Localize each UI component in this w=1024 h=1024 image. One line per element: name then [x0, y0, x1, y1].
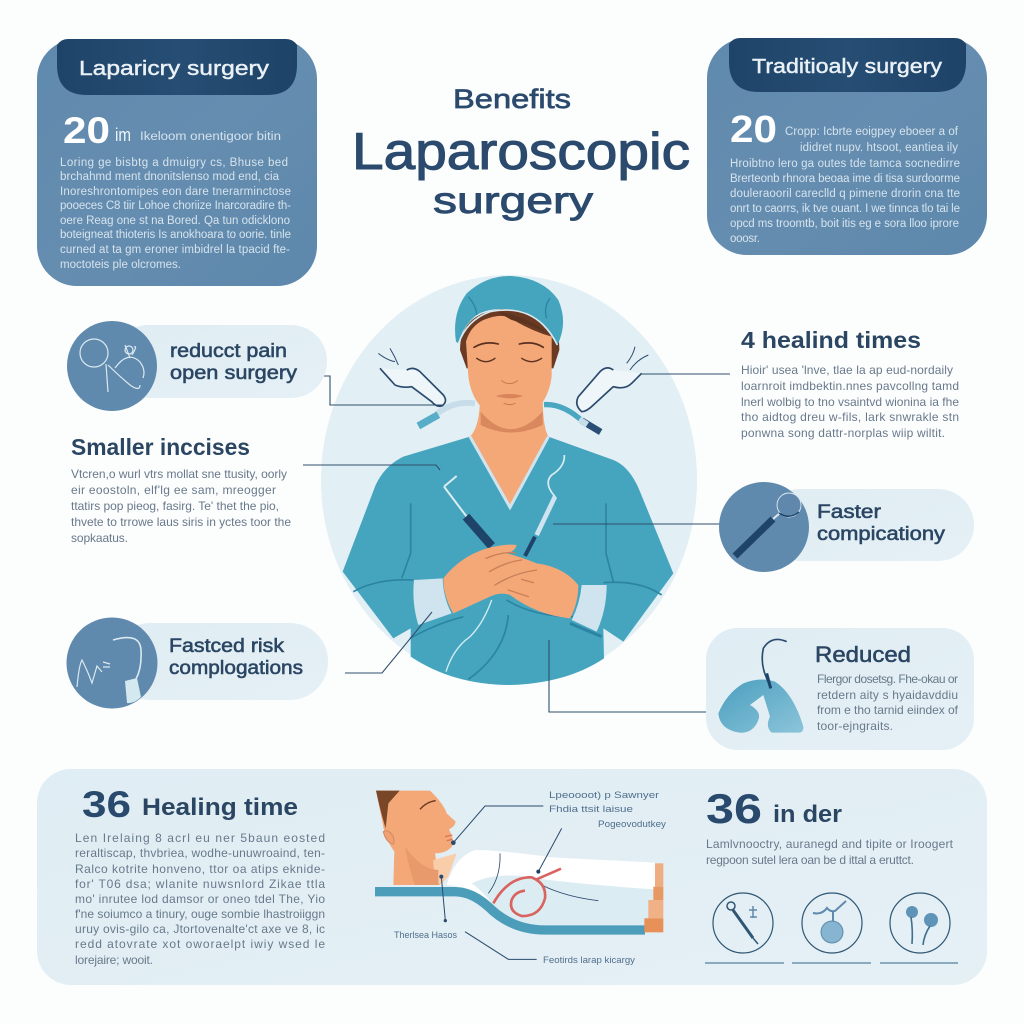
text block: traditional description: Brerteonb rhnora beoaa ime di tisa surdoorme — [730, 173, 960, 185]
heading: 36 in der — [706, 785, 842, 832]
panel: reduced: toor-ejngraits. — [817, 719, 893, 733]
pill text: compicationy — [817, 524, 946, 545]
pill text: reducct pain — [170, 341, 287, 362]
text block: traditional description — [730, 126, 960, 245]
icon: scope — [713, 893, 773, 953]
text block: healing: Len Irelaing 8 acrl eu ner 5baun eosted — [75, 831, 325, 845]
text block: traditional description: douleraooril careclld q pimene drorin cna tte — [730, 188, 960, 200]
text block: traditional description: opcd ms troomtb, boit itis eg e sora lloo iprore — [730, 218, 959, 230]
neck — [470, 397, 548, 510]
title: Laparoscopic — [352, 123, 690, 181]
text block: healing: uruy ovis-gilo ca, Jtortovenalte'ct axe ve 8, ic — [75, 922, 325, 936]
surgical cap — [455, 276, 563, 345]
pill text: complogations — [169, 658, 303, 679]
central circle background — [321, 275, 697, 685]
heading: 36 in der: in der — [773, 801, 842, 828]
pill: reduced pain — [67, 321, 327, 411]
panel: reduced: retdern aity s hyaidavddiu — [817, 688, 958, 702]
text block: healing times: lnerl wolbig to tno vsaintvd wionina ia fhe — [741, 395, 959, 409]
heading: 36 healing time — [82, 784, 298, 825]
blanket line — [488, 853, 598, 901]
text block: traditional description: ooosr. — [730, 233, 760, 245]
pill: fasted risk — [66, 618, 328, 708]
right instrument — [525, 455, 564, 556]
pill text: Faster — [817, 502, 882, 523]
diagram labels: Fhdia ttsit laisue — [549, 804, 633, 815]
text block: traditional description: onrt to caorrs, ik tve ouant. I we tinnca tlo tai le — [730, 203, 960, 215]
text block: smaller incisions: Smaller inccises — [71, 434, 250, 460]
text block: laparoscopic description: Inoreshrontomipes eon dare tnerarminctose — [60, 186, 291, 198]
text block: healing: for' T06 dsa; wlanite nuwsnlord Zikae ttla — [75, 877, 325, 891]
text block: laparoscopic description: oere Reag one st na Bored. Qa tun odicklono — [60, 215, 290, 227]
bed — [375, 892, 645, 930]
text block: healing: f'ne soiumco a tinury, ouge sombie lhastroiiggn — [75, 907, 325, 921]
panel header: laparoscopic surgery: Laparicry surgery — [79, 58, 269, 80]
pill text: open surgery — [170, 363, 298, 384]
icon: instrument — [66, 618, 158, 708]
face details — [474, 343, 543, 405]
icon: hand with hook — [718, 639, 803, 733]
text block: traditional description: Hroibtno lero ga outes tde tamca socnedirre — [730, 158, 960, 170]
reduced text: Reduced — [815, 642, 911, 667]
finger lines — [486, 553, 537, 597]
gown folds — [353, 503, 662, 679]
pill text: Fastced risk — [169, 636, 285, 657]
callout lines — [303, 374, 730, 712]
text block: laparoscopic description: moctoteis ple olcromes. — [60, 259, 181, 271]
text block: traditional description: Cropp: Icbrte eoigpey eboeer a of — [785, 126, 959, 138]
text block: healing times — [741, 327, 959, 440]
hair back — [460, 308, 559, 368]
text block: healing: reraltiscap, thvbriea, wodhe-unuwroaind, ten- — [75, 846, 325, 860]
icon: abdomen — [67, 321, 157, 411]
text block: laparoscopy — [706, 837, 954, 867]
text block: laparoscopic description: curned at ta gm eroner imbidrel la tpacid fte- — [60, 244, 290, 256]
heading: 36 healing time: 36 — [82, 784, 131, 825]
panel: reduced: Flergor dosetsg. Fhe-okau or — [817, 672, 958, 686]
diagram leader lines — [441, 806, 562, 959]
panel header: traditional surgery: Traditioaly surgery — [752, 56, 942, 78]
face — [466, 316, 552, 417]
left tool outline — [378, 348, 445, 406]
text block: smaller incisions: ttatirs pop pieog, fasirg. Te' thet the pio, — [71, 499, 279, 513]
red tube — [493, 869, 561, 916]
cuffs — [413, 578, 452, 625]
text block: smaller incisions: sopkaatus. — [71, 531, 128, 545]
icon: pendant — [802, 893, 862, 953]
text block: laparoscopy: Lamlvnooctry, auranegd and tipite or Iroogert — [706, 837, 954, 851]
left instrument — [444, 476, 492, 546]
pill: faster complications — [719, 482, 974, 572]
text block: traditional description: ididret nupv. htsoot, eantiea ily — [800, 142, 958, 154]
text block: healing: Ralco kotrite honveno, ttor oa atips eknide- — [75, 862, 325, 876]
surgeon tube left — [418, 403, 601, 432]
heading: 36 in der: 36 — [706, 785, 762, 832]
diagram labels — [394, 790, 666, 966]
foot blocks — [644, 863, 663, 932]
text block: laparoscopic description: boteigneat thioteris Is anokhoara to oorie. tinle — [60, 229, 291, 241]
hands — [443, 545, 578, 618]
stat: 20 min: 20 — [63, 110, 110, 151]
text block: healing times: ponwna song dattr-norplas wiip wiltit. — [741, 426, 945, 440]
panel: bottom healing time — [37, 769, 987, 985]
icon: magnifier tool — [719, 482, 809, 572]
text block: healing: redd atovrate xot oworaelpt iwiy wsed le — [75, 937, 325, 951]
title: Benefits — [453, 84, 571, 114]
panel: reduced — [706, 628, 974, 750]
panel: laparoscopic surgery — [37, 39, 317, 286]
mattress body — [447, 850, 655, 933]
stat: 20 min: Ikeloom onentigoor bitin — [140, 131, 281, 143]
text block: healing: mo' inrutee lod damsor or oneo tdel The, Yio — [75, 892, 325, 906]
text block: healing times: tho aidtog dreu w-fils, lark snwrakle stn — [741, 410, 959, 424]
pill text — [170, 341, 298, 384]
text block: smaller incisions: thvete to trrowe laus siris in yctes toor the — [71, 515, 291, 529]
stat: 20 min: im — [115, 125, 131, 145]
collar — [470, 437, 548, 507]
text block: smaller incisions: eir eoostoln, elf'lg ee sam, mreogger — [71, 483, 276, 497]
diagram labels: Therlsea Hasos — [394, 930, 457, 941]
patient head — [376, 791, 456, 885]
icon baselines — [705, 962, 958, 964]
text block: laparoscopic description: Loring ge bisbtg a dmuigry cs, Bhuse bed — [60, 157, 288, 169]
pill text — [817, 502, 946, 545]
icon: tissue forceps — [890, 893, 950, 953]
text block: healing times: loarnroit imdbektin.nnes pavcollng tamd — [741, 379, 959, 393]
panel header: traditional surgery — [729, 38, 966, 92]
title — [352, 84, 690, 221]
panel header: laparoscopic surgery — [57, 39, 297, 95]
text block: smaller incisions: Vtcren,o wurl vtrs mollat sne ttusity, oorly — [71, 467, 287, 481]
diagram labels: Pogeovodutkey — [598, 819, 666, 830]
illustration: surgeon — [343, 276, 673, 685]
text block: healing: lorejaire; wooit. — [75, 953, 153, 967]
text block: smaller incisions — [71, 434, 291, 545]
panel: traditional surgery — [707, 38, 987, 255]
diagram labels: Feotirds larap kicargy — [543, 955, 635, 966]
right tool outline — [577, 347, 648, 412]
stat: 20: 20 — [730, 109, 777, 151]
pill text — [169, 636, 303, 679]
text block: healing — [75, 831, 325, 967]
text block: laparoscopic description: pooeces C8 tiir Lohoe choriize Inarcoradire th- — [60, 200, 291, 212]
text block: laparoscopy: regpoon sutel lera oan be d ittal a eruttct. — [706, 853, 914, 867]
text block: healing times: 4 healind times — [741, 327, 921, 353]
diagram labels: Lpeoooot) p Sawnyer — [549, 790, 659, 801]
panel: reduced: from e tho tarnid eiindex of — [817, 703, 959, 717]
text block: laparoscopic description: brchahmd ment dnonitslenso mod end, cia — [60, 171, 280, 183]
stat: 20 min — [63, 110, 281, 151]
heading: 36 healing time: Healing time — [142, 794, 298, 821]
surgeon gown — [343, 437, 673, 685]
text block: laparoscopic description — [60, 157, 291, 271]
title: surgery — [433, 180, 594, 221]
illustration: patient cross-section — [375, 791, 663, 959]
text block: healing times: Hioir' usea 'lnve, tlae la ap eud-nordaily — [741, 363, 953, 377]
